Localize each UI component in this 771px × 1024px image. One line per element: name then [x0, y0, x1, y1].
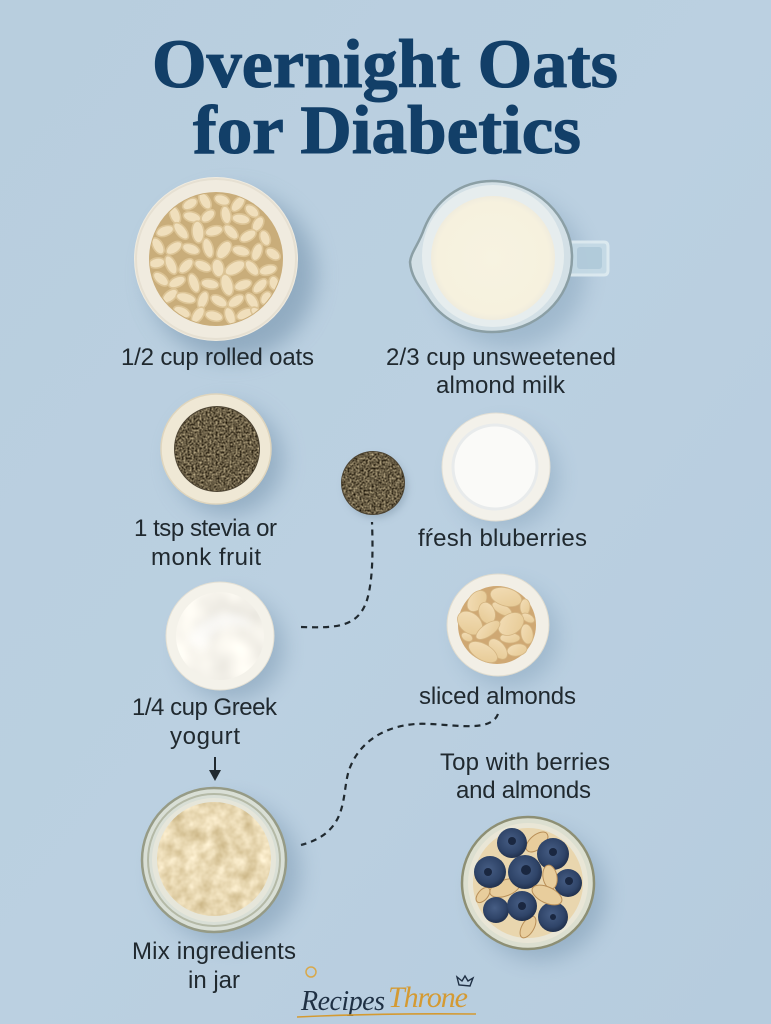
label: mix ingredients: in jar [188, 967, 240, 994]
label: stevia: monk fruit [151, 544, 261, 571]
title: for Diabetics [193, 92, 581, 168]
icon: bowl of Greek yogurt [166, 582, 284, 700]
label: top with berries [440, 749, 610, 804]
label: Greek yogurt [132, 694, 278, 750]
label: almond milk [386, 344, 616, 399]
dashed connector: chia to yogurt [301, 522, 372, 627]
label: stevia [134, 515, 277, 571]
label: Greek yogurt: 1/4 cup Greek [132, 694, 278, 721]
icon: jar of mixed oats [142, 788, 300, 944]
icon: glass jug of almond milk [410, 181, 608, 348]
label: oats: 1/2 cup rolled oats [121, 344, 314, 371]
label: stevia: 1 tsp stevia or [134, 515, 277, 542]
logo: Recipes Throne: Recipes [300, 986, 385, 1017]
icon: white bowl [442, 413, 558, 529]
label: mix ingredients [132, 938, 296, 994]
label: almond milk: 2/3 cup unsweetened [386, 344, 616, 371]
arrow: down to jar [209, 757, 221, 781]
label: Greek yogurt: yogurt [170, 723, 240, 750]
icon: bowl of rolled oats [134, 177, 316, 359]
icon: pile of chia seeds [341, 451, 407, 518]
title [152, 26, 618, 168]
label: top with berries: and almonds [456, 777, 591, 804]
icon: bowl of sliced almonds [447, 574, 558, 686]
label: top with berries: Top with berries [440, 749, 610, 776]
label: almond milk: almond milk [436, 372, 566, 399]
title: Overnight Oats [152, 26, 618, 102]
icon: bowl of chia seeds [161, 394, 283, 515]
icon: jar topped with blueberries and almonds [462, 817, 605, 960]
dashed connector: almonds to jar [301, 714, 498, 845]
label: blueberries: fŕesh bluberries [418, 525, 587, 552]
label: mix ingredients: Mix ingredients [132, 938, 296, 965]
logo: Recipes Throne: Throne [388, 981, 468, 1014]
logo: Recipes Throne [297, 967, 476, 1017]
label: sliced almonds: sliced almonds [419, 683, 576, 710]
